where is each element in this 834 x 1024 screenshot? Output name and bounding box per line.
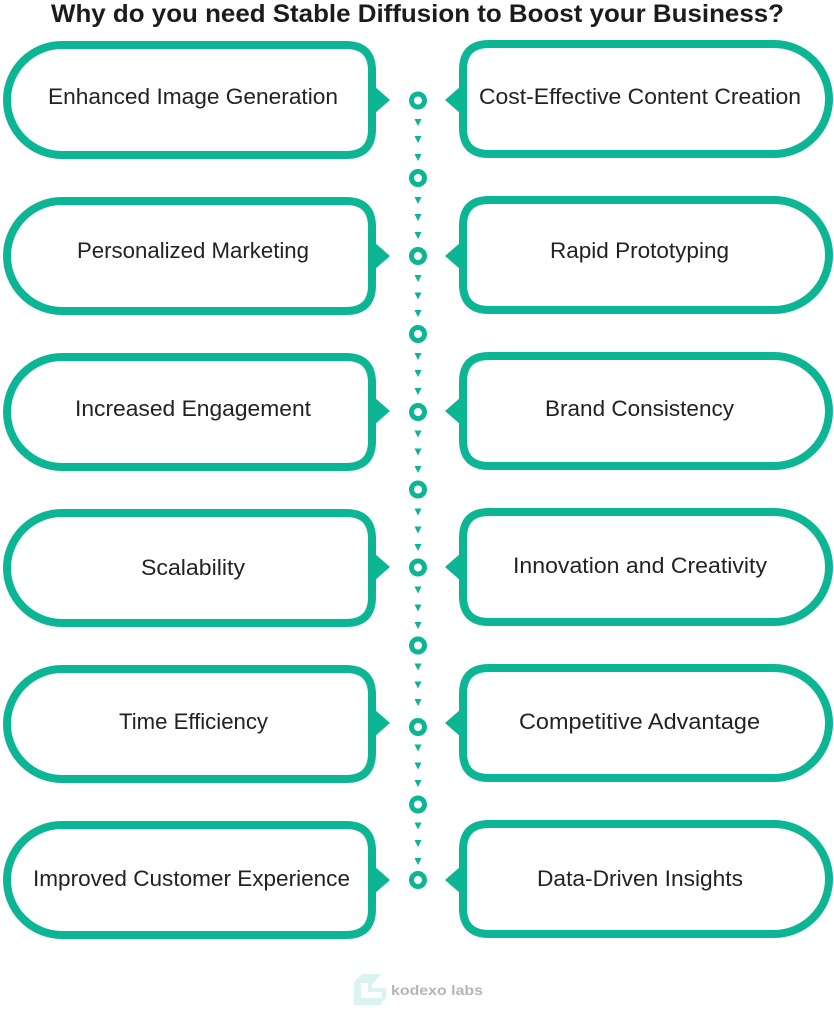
panel: Scalability <box>7 513 390 623</box>
panel: Innovation and Creativity: Innovation and Creativity <box>513 553 767 578</box>
panel: Rapid Prototyping: Rapid Prototyping <box>550 238 729 263</box>
panel: Brand Consistency: Brand Consistency <box>545 396 734 421</box>
panel: Competitive Advantage <box>445 668 829 778</box>
panel: Rapid Prototyping <box>445 200 829 310</box>
dotted timeline <box>412 94 424 886</box>
panel: Time Efficiency: Time Efficiency <box>119 709 268 734</box>
panel: Innovation and Creativity <box>445 512 829 622</box>
panel: Improved Customer Experience <box>7 825 390 935</box>
panel: Increased Engagement: Increased Engagement <box>75 396 311 421</box>
logo: kodexo labs: kodexo labs <box>391 982 483 998</box>
panel: Cost-Effective Content Creation: Cost-Effective Content Creation <box>479 84 801 109</box>
panel: Enhanced Image Generation: Enhanced Image Generation <box>48 84 338 109</box>
panel: Improved Customer Experience: Improved Customer Experience <box>33 866 350 891</box>
title: Why do you need Stable Diffusion to Boost your Business? <box>51 0 784 28</box>
panel: Data-Driven Insights: Data-Driven Insights <box>537 866 743 891</box>
panel: Brand Consistency <box>445 356 829 466</box>
logo: kodexo labs <box>354 974 483 1005</box>
panel: Scalability: Scalability <box>141 555 245 580</box>
panel: Personalized Marketing <box>7 201 390 311</box>
panel: Time Efficiency <box>7 669 390 779</box>
panel: Cost-Effective Content Creation <box>445 44 829 154</box>
panel: Increased Engagement <box>7 357 390 467</box>
panel: Competitive Advantage: Competitive Advantage <box>519 709 760 734</box>
panel: Data-Driven Insights <box>445 824 829 934</box>
panel: Personalized Marketing: Personalized Marketing <box>77 238 309 263</box>
panel: Enhanced Image Generation <box>7 45 390 155</box>
